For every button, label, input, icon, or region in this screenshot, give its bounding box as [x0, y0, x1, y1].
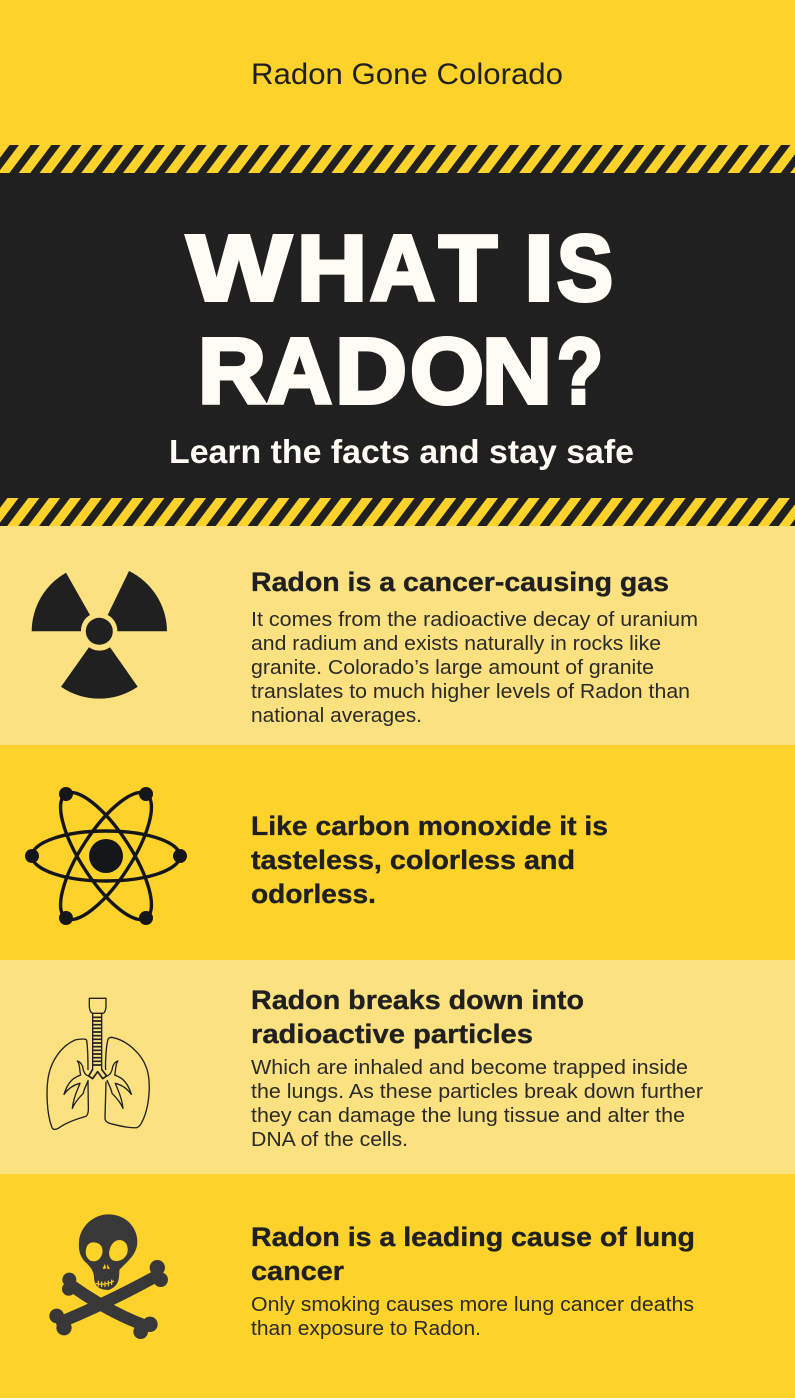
- subtitle: Learn the facts and stay safe: [169, 433, 634, 470]
- title: S: [557, 216, 613, 320]
- body text: they can damage the lung tissue and alter the: [251, 1104, 685, 1127]
- icon: skull and crossbones: [49, 1214, 168, 1339]
- body text: the lungs. As these particles break down further: [251, 1080, 703, 1103]
- hazard stripe bottom: [0, 498, 795, 526]
- heading: [251, 985, 584, 1049]
- body text: translates to much higher levels of Radon than: [251, 680, 690, 703]
- title: A: [267, 319, 332, 423]
- heading: [251, 811, 608, 909]
- body text: and radium and exists naturally in rocks like: [251, 632, 661, 655]
- icon: lungs: [47, 998, 149, 1129]
- heading: tasteless, colorless and: [251, 845, 575, 875]
- heading: [251, 1222, 695, 1286]
- title: I: [524, 216, 554, 320]
- title: O: [410, 319, 484, 423]
- panel: radioactive particles: [0, 960, 795, 1174]
- body text: national averages.: [251, 704, 422, 727]
- body text: [251, 608, 698, 727]
- panel: cancer-causing gas: [0, 526, 795, 745]
- hazard stripe top: [0, 145, 795, 173]
- body text: [251, 1056, 703, 1151]
- heading: Radon is a leading cause of lung: [251, 1222, 695, 1252]
- body text: Only smoking causes more lung cancer deaths: [251, 1293, 694, 1316]
- organization name: Radon Gone Colorado: [251, 58, 563, 91]
- heading: radioactive particles: [251, 1019, 533, 1049]
- body text: granite. Colorado’s large amount of granite: [251, 656, 654, 679]
- hero banner: [0, 145, 795, 526]
- heading: Like carbon monoxide it is: [251, 811, 608, 841]
- title: ?: [557, 319, 603, 423]
- icon: atom: [25, 780, 187, 932]
- body text: [251, 1293, 694, 1340]
- title: [187, 216, 613, 423]
- title: N: [482, 319, 552, 423]
- heading: Radon breaks down into: [251, 985, 584, 1015]
- heading: cancer: [251, 1256, 345, 1286]
- icon: radiation symbol: [32, 571, 167, 699]
- panel: tasteless, colorless, odorless: [0, 745, 795, 960]
- panel: leading cause of lung cancer: [0, 1174, 795, 1398]
- title: H: [297, 216, 367, 320]
- title: R: [198, 319, 266, 423]
- body text: than exposure to Radon.: [251, 1317, 481, 1340]
- title: D: [335, 319, 407, 423]
- body text: DNA of the cells.: [251, 1128, 408, 1151]
- body text: Which are inhaled and become trapped inside: [251, 1056, 688, 1079]
- title: W: [187, 216, 291, 320]
- body text: It comes from the radioactive decay of uranium: [251, 608, 698, 631]
- title: T: [439, 216, 497, 320]
- heading: odorless.: [251, 879, 376, 909]
- heading: Radon is a cancer-causing gas: [251, 567, 669, 597]
- title: A: [370, 216, 435, 320]
